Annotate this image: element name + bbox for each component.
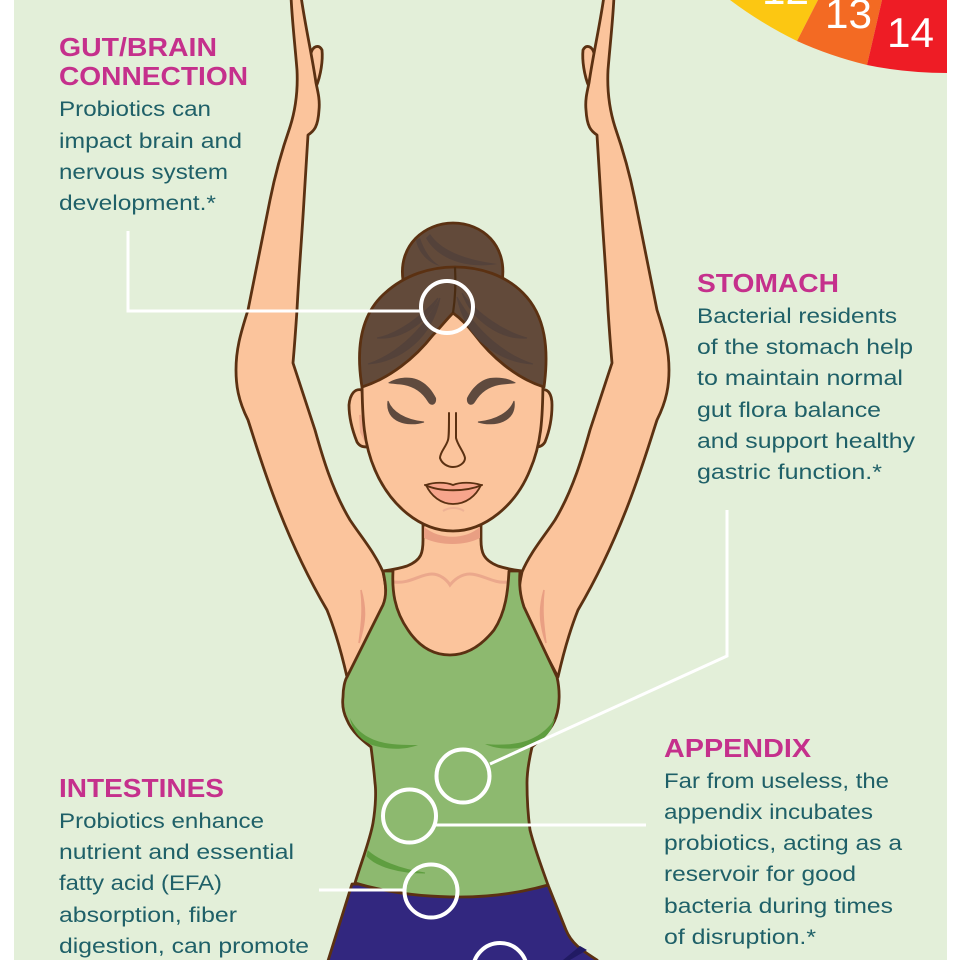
ear shape [534, 390, 552, 447]
body: Far from useless, the [664, 770, 889, 793]
body: nervous system [59, 161, 228, 184]
armpit crease [359, 590, 365, 643]
leggings shape [327, 884, 600, 960]
leggings [327, 884, 600, 960]
body: of disruption.* [664, 926, 816, 949]
body [664, 770, 902, 949]
hair shape [360, 267, 546, 387]
marker circle [404, 864, 458, 918]
arm shape [519, 0, 669, 677]
heading: INTESTINES [59, 773, 224, 803]
left bust shadow [350, 718, 418, 749]
segment: yellow [730, 0, 818, 41]
leader line [436, 824, 646, 826]
heading: CONNECTION [59, 61, 248, 91]
lips [426, 483, 481, 504]
lip line [425, 485, 482, 490]
body: Probiotics enhance [59, 810, 264, 833]
body: to maintain normal [697, 367, 903, 390]
connector: stomach [436, 510, 727, 802]
leader line [128, 231, 420, 311]
connector: appendix [383, 790, 646, 842]
body: of the stomach help [697, 336, 913, 359]
tank top [343, 571, 559, 897]
body: impact brain and [59, 130, 242, 153]
body: bacteria during times [664, 895, 893, 918]
collarbones [394, 574, 507, 585]
ear shape [349, 390, 368, 447]
bun strands [416, 234, 497, 266]
right arm [519, 0, 669, 677]
lower marker circle [473, 943, 527, 960]
body: nutrient and essential [59, 841, 294, 864]
body: reservoir for good [664, 863, 856, 886]
text block: stomach [697, 268, 916, 484]
chin shadow [424, 527, 480, 544]
body: Probiotics can [59, 98, 211, 121]
text block: intestines [59, 773, 309, 958]
ear shadow [360, 415, 365, 440]
armpit crease [540, 590, 546, 643]
hair front [360, 267, 546, 387]
face [362, 290, 543, 531]
body: appendix incubates [664, 801, 873, 824]
left arm [236, 0, 386, 677]
thumb [583, 46, 594, 87]
arm shape [236, 0, 386, 677]
leggings fold [563, 946, 587, 960]
body: development.* [59, 192, 216, 215]
right eyebrow [467, 378, 516, 405]
waist fold [367, 851, 425, 873]
neck skin [383, 515, 522, 680]
pH scale corner arc [730, 0, 947, 73]
right bust shadow [485, 718, 555, 749]
woman figure in yoga pose [236, 0, 669, 960]
leader line [490, 510, 727, 764]
marker circle [436, 750, 490, 802]
top shape [343, 571, 559, 897]
heading: STOMACH [697, 268, 839, 298]
heading: APPENDIX [664, 733, 812, 763]
body [59, 98, 242, 215]
segment: red [867, 0, 947, 73]
text block: gut/brain connection [59, 32, 248, 215]
left ear [349, 390, 368, 447]
number 14: 14 [887, 9, 934, 56]
marker circle [421, 281, 473, 333]
connector: gut/brain [128, 231, 473, 333]
right ear [534, 390, 552, 447]
under lip shadow [443, 508, 464, 511]
marker circle [383, 790, 436, 842]
body: gastric function.* [697, 461, 882, 484]
body: fatty acid (EFA) [59, 872, 222, 895]
heading [59, 32, 248, 91]
body [697, 305, 916, 484]
hair bun [402, 223, 503, 282]
hair parting [453, 267, 455, 313]
nose [440, 413, 465, 467]
left eyebrow [388, 378, 436, 405]
thumb [311, 46, 322, 87]
hair strands [368, 293, 533, 364]
body: absorption, fiber [59, 904, 237, 927]
connector: intestines [319, 864, 458, 918]
right eye [478, 401, 514, 424]
ear shadow [537, 415, 542, 440]
body: digestion, can promote [59, 935, 309, 958]
left eye [388, 401, 424, 424]
body [59, 810, 309, 958]
text block: appendix [664, 733, 902, 949]
body: and support healthy [697, 430, 916, 453]
neck and chest [383, 515, 522, 680]
heading: GUT/BRAIN [59, 32, 217, 62]
body: Bacterial residents [697, 305, 897, 328]
mouth [425, 483, 482, 511]
body: probiotics, acting as a [664, 832, 902, 855]
leader line [319, 888, 405, 892]
segment: orange [797, 0, 882, 65]
bun shape [402, 223, 503, 282]
body: gut flora balance [697, 399, 881, 422]
